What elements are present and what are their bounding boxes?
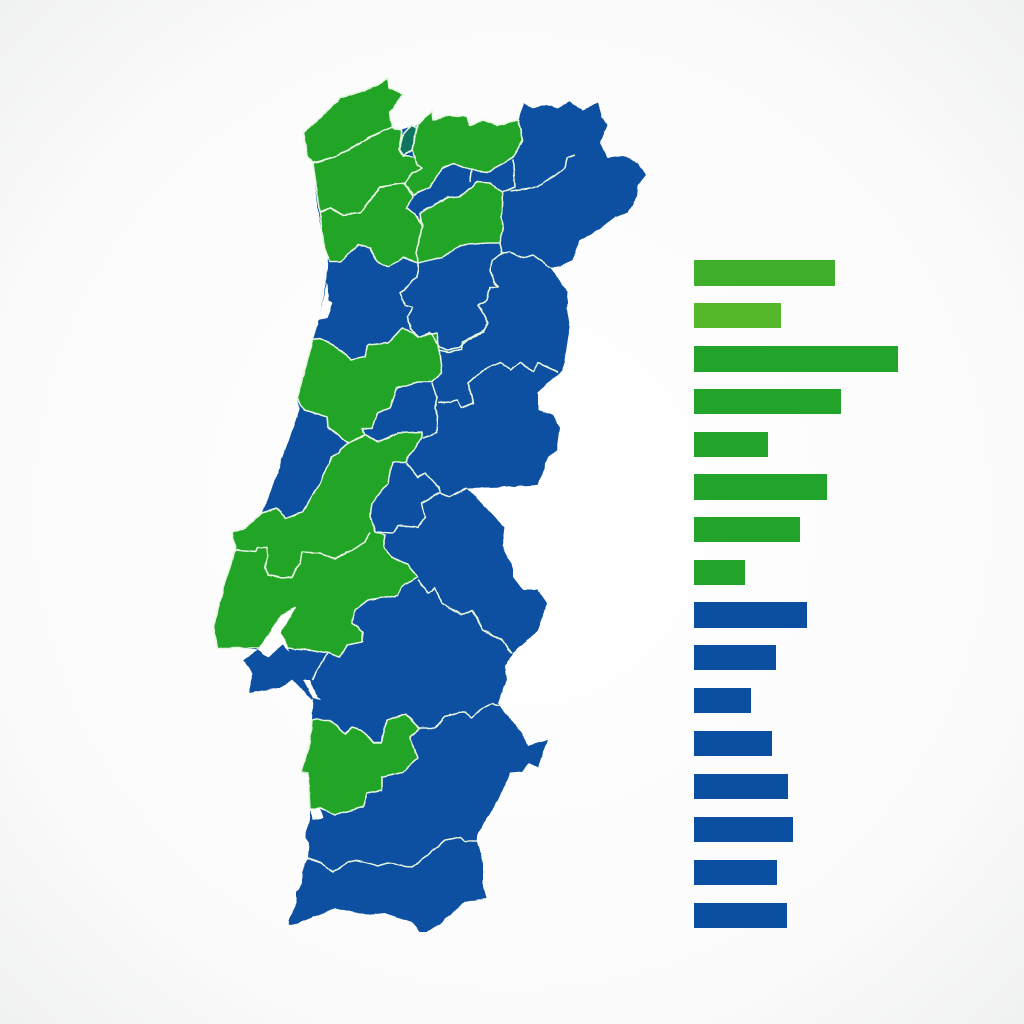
green region: southwest (301, 714, 419, 815)
water inlets (258, 282, 333, 820)
southwest lagoon (310, 808, 323, 820)
region boundaries (235, 155, 575, 872)
Sado estuary (303, 680, 321, 700)
green region: north interior (417, 182, 503, 263)
Tagus estuary (258, 608, 295, 658)
northern lake (399, 125, 417, 156)
green region: northwest second band (313, 127, 422, 215)
map of Portugal (213, 78, 646, 932)
green region: northwest third band (320, 183, 422, 267)
green region: north (405, 110, 523, 195)
green region: centre coast (297, 328, 442, 443)
blue bars (694, 602, 807, 928)
map base: blue regions (213, 78, 646, 932)
green regions (213, 78, 523, 815)
green bars (694, 260, 898, 585)
green region: Minho coast (303, 78, 403, 162)
bar chart (694, 260, 898, 928)
Aveiro lagoon (318, 282, 333, 320)
green region: valley and Lisbon (213, 432, 422, 657)
